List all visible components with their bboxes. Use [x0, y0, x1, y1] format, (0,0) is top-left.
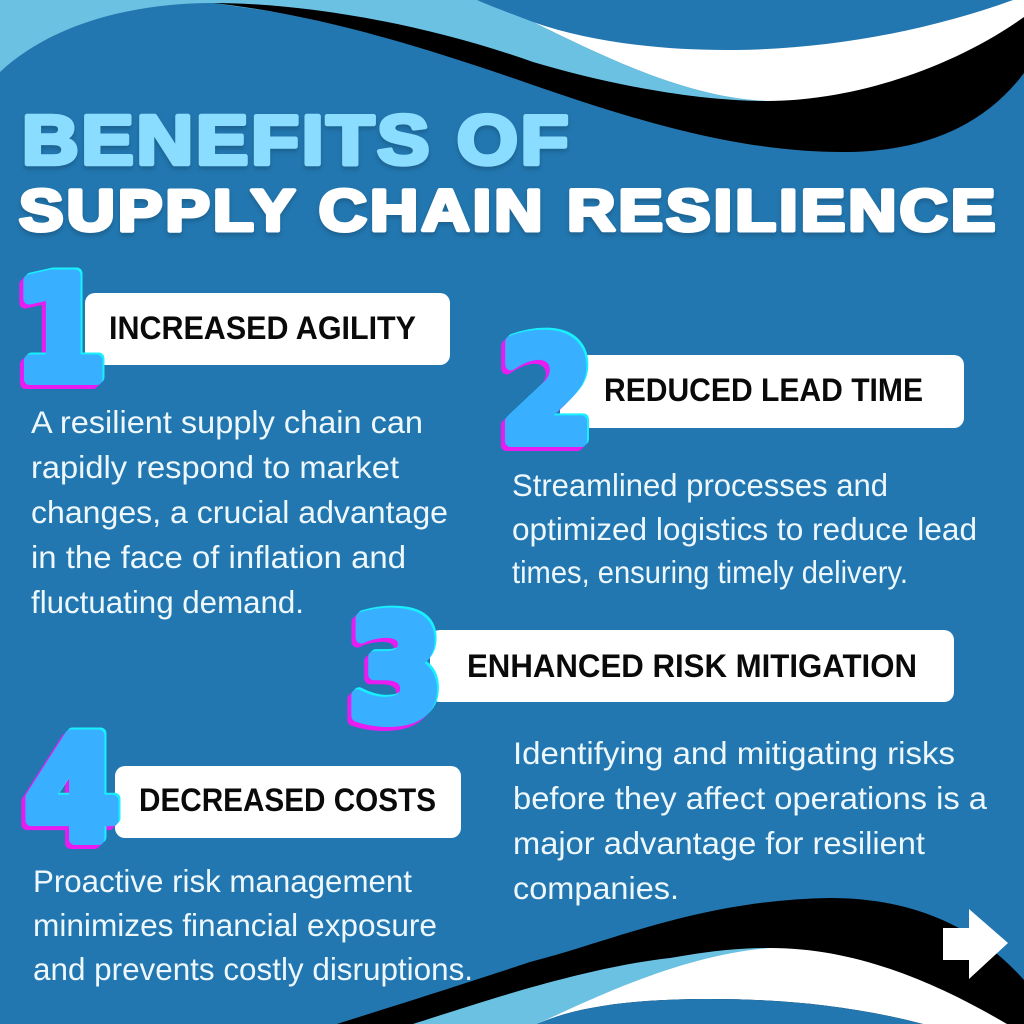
heading 3: ENHANCED RISK MITIGATION [467, 648, 917, 684]
body text 3: before they affect operations is a [513, 780, 987, 816]
title line: benefits of: BENEFITS OF [22, 101, 569, 179]
body text 2: Streamlined processes and [512, 467, 888, 503]
body text 4 [33, 863, 473, 987]
panel: enhanced risk mitigation [348, 588, 987, 906]
heading 1: INCREASED AGILITY [109, 310, 416, 346]
number 3: 3 [348, 588, 442, 753]
body text 4: minimizes financial exposure [33, 907, 437, 943]
body text 1: rapidly respond to market [31, 449, 399, 485]
number 1: 1 [14, 248, 106, 413]
bottom wave decoration [337, 898, 1024, 1024]
body text 1: fluctuating demand. [31, 584, 304, 620]
body text 1 [31, 404, 448, 620]
body text 4: and prevents costly disruptions. [33, 951, 473, 987]
title [19, 101, 995, 243]
heading bar 4 [115, 766, 461, 838]
body text 1: A resilient supply chain can [31, 404, 423, 440]
body text 3 [513, 735, 987, 906]
title line: supply chain resilience: SUPPLY CHAIN RESILIENCE [19, 179, 995, 243]
body text 3: Identifying and mitigating risks [513, 735, 955, 771]
body text 2: times, ensuring timely delivery. [512, 554, 908, 590]
heading bar 3 [430, 630, 954, 702]
body text 3: companies. [513, 870, 679, 906]
body text 4: Proactive risk management [33, 863, 412, 899]
heading bar 1 [85, 293, 450, 365]
number 2: 2 [500, 310, 593, 475]
body text 1: changes, a crucial advantage [31, 494, 448, 530]
top wave decoration [0, 0, 1024, 152]
heading 4: DECREASED COSTS [139, 782, 436, 818]
panel: increased agility [14, 248, 450, 620]
panel: decreased costs [25, 708, 473, 987]
icon: next arrow [943, 909, 1008, 979]
body text 1: in the face of inflation and [31, 539, 406, 575]
heading 2: REDUCED LEAD TIME [604, 372, 923, 408]
panel: reduced lead time [500, 310, 977, 590]
body text 2 [512, 467, 977, 590]
number 4: 4 [25, 708, 119, 873]
body text 2: optimized logistics to reduce lead [512, 511, 977, 547]
body text 3: major advantage for resilient [513, 825, 925, 861]
heading bar 2 [560, 355, 964, 428]
